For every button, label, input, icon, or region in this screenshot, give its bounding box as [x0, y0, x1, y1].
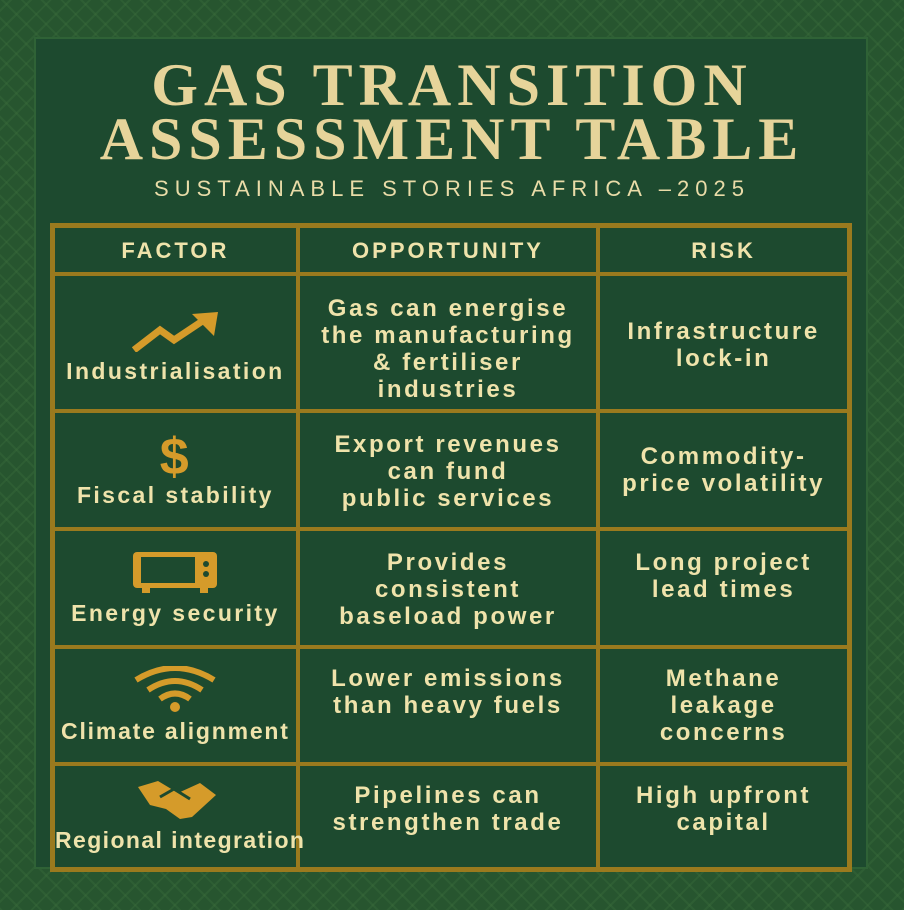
- table: leakage: [670, 692, 777, 719]
- table: Commodity-: [641, 443, 807, 470]
- table: Lower emissions: [331, 665, 565, 692]
- table: industries: [378, 376, 518, 402]
- table: Climate alignment: [61, 718, 290, 744]
- table: than heavy fuels: [333, 692, 563, 719]
- icon: trend arrow: [132, 312, 218, 352]
- table: Long project: [635, 549, 812, 576]
- icon: dollar: $: [160, 428, 191, 486]
- table: lock-in: [676, 345, 771, 372]
- table: Provides: [387, 549, 509, 576]
- subtitle: SUSTAINABLE STORIES AFRICA –2025: [154, 176, 750, 201]
- title: ASSESSMENT TABLE: [100, 106, 804, 172]
- table: & fertiliser: [373, 348, 523, 376]
- table: Industrialisation: [66, 358, 285, 384]
- table: lead times: [652, 576, 795, 603]
- title: [100, 52, 804, 172]
- table: consistent: [375, 576, 521, 603]
- icon: wifi: [134, 666, 216, 712]
- icon: handshake: [138, 781, 216, 819]
- table: the manufacturing: [321, 322, 575, 348]
- table: Energy security: [71, 600, 280, 626]
- table: OPPORTUNITY: [352, 238, 544, 262]
- table: Fiscal stability: [77, 482, 274, 508]
- table: baseload power: [339, 603, 557, 630]
- table: can fund: [388, 458, 508, 485]
- title: GAS TRANSITION: [151, 52, 753, 118]
- table: price volatility: [622, 470, 825, 497]
- table: Regional integration: [55, 827, 305, 853]
- table: Pipelines can: [354, 782, 542, 809]
- table: High upfront: [636, 782, 811, 809]
- table: [50, 223, 852, 872]
- table: public services: [342, 485, 554, 512]
- table: Gas can energise: [328, 294, 568, 322]
- table: strengthen trade: [332, 809, 563, 836]
- table: Export revenues: [334, 431, 562, 458]
- table: Infrastructure: [627, 318, 820, 345]
- table: Methane: [666, 665, 781, 692]
- table: FACTOR: [121, 238, 229, 262]
- icon: tv: [133, 552, 217, 593]
- table: concerns: [660, 719, 787, 746]
- table: RISK: [691, 238, 756, 262]
- table: capital: [676, 809, 771, 836]
